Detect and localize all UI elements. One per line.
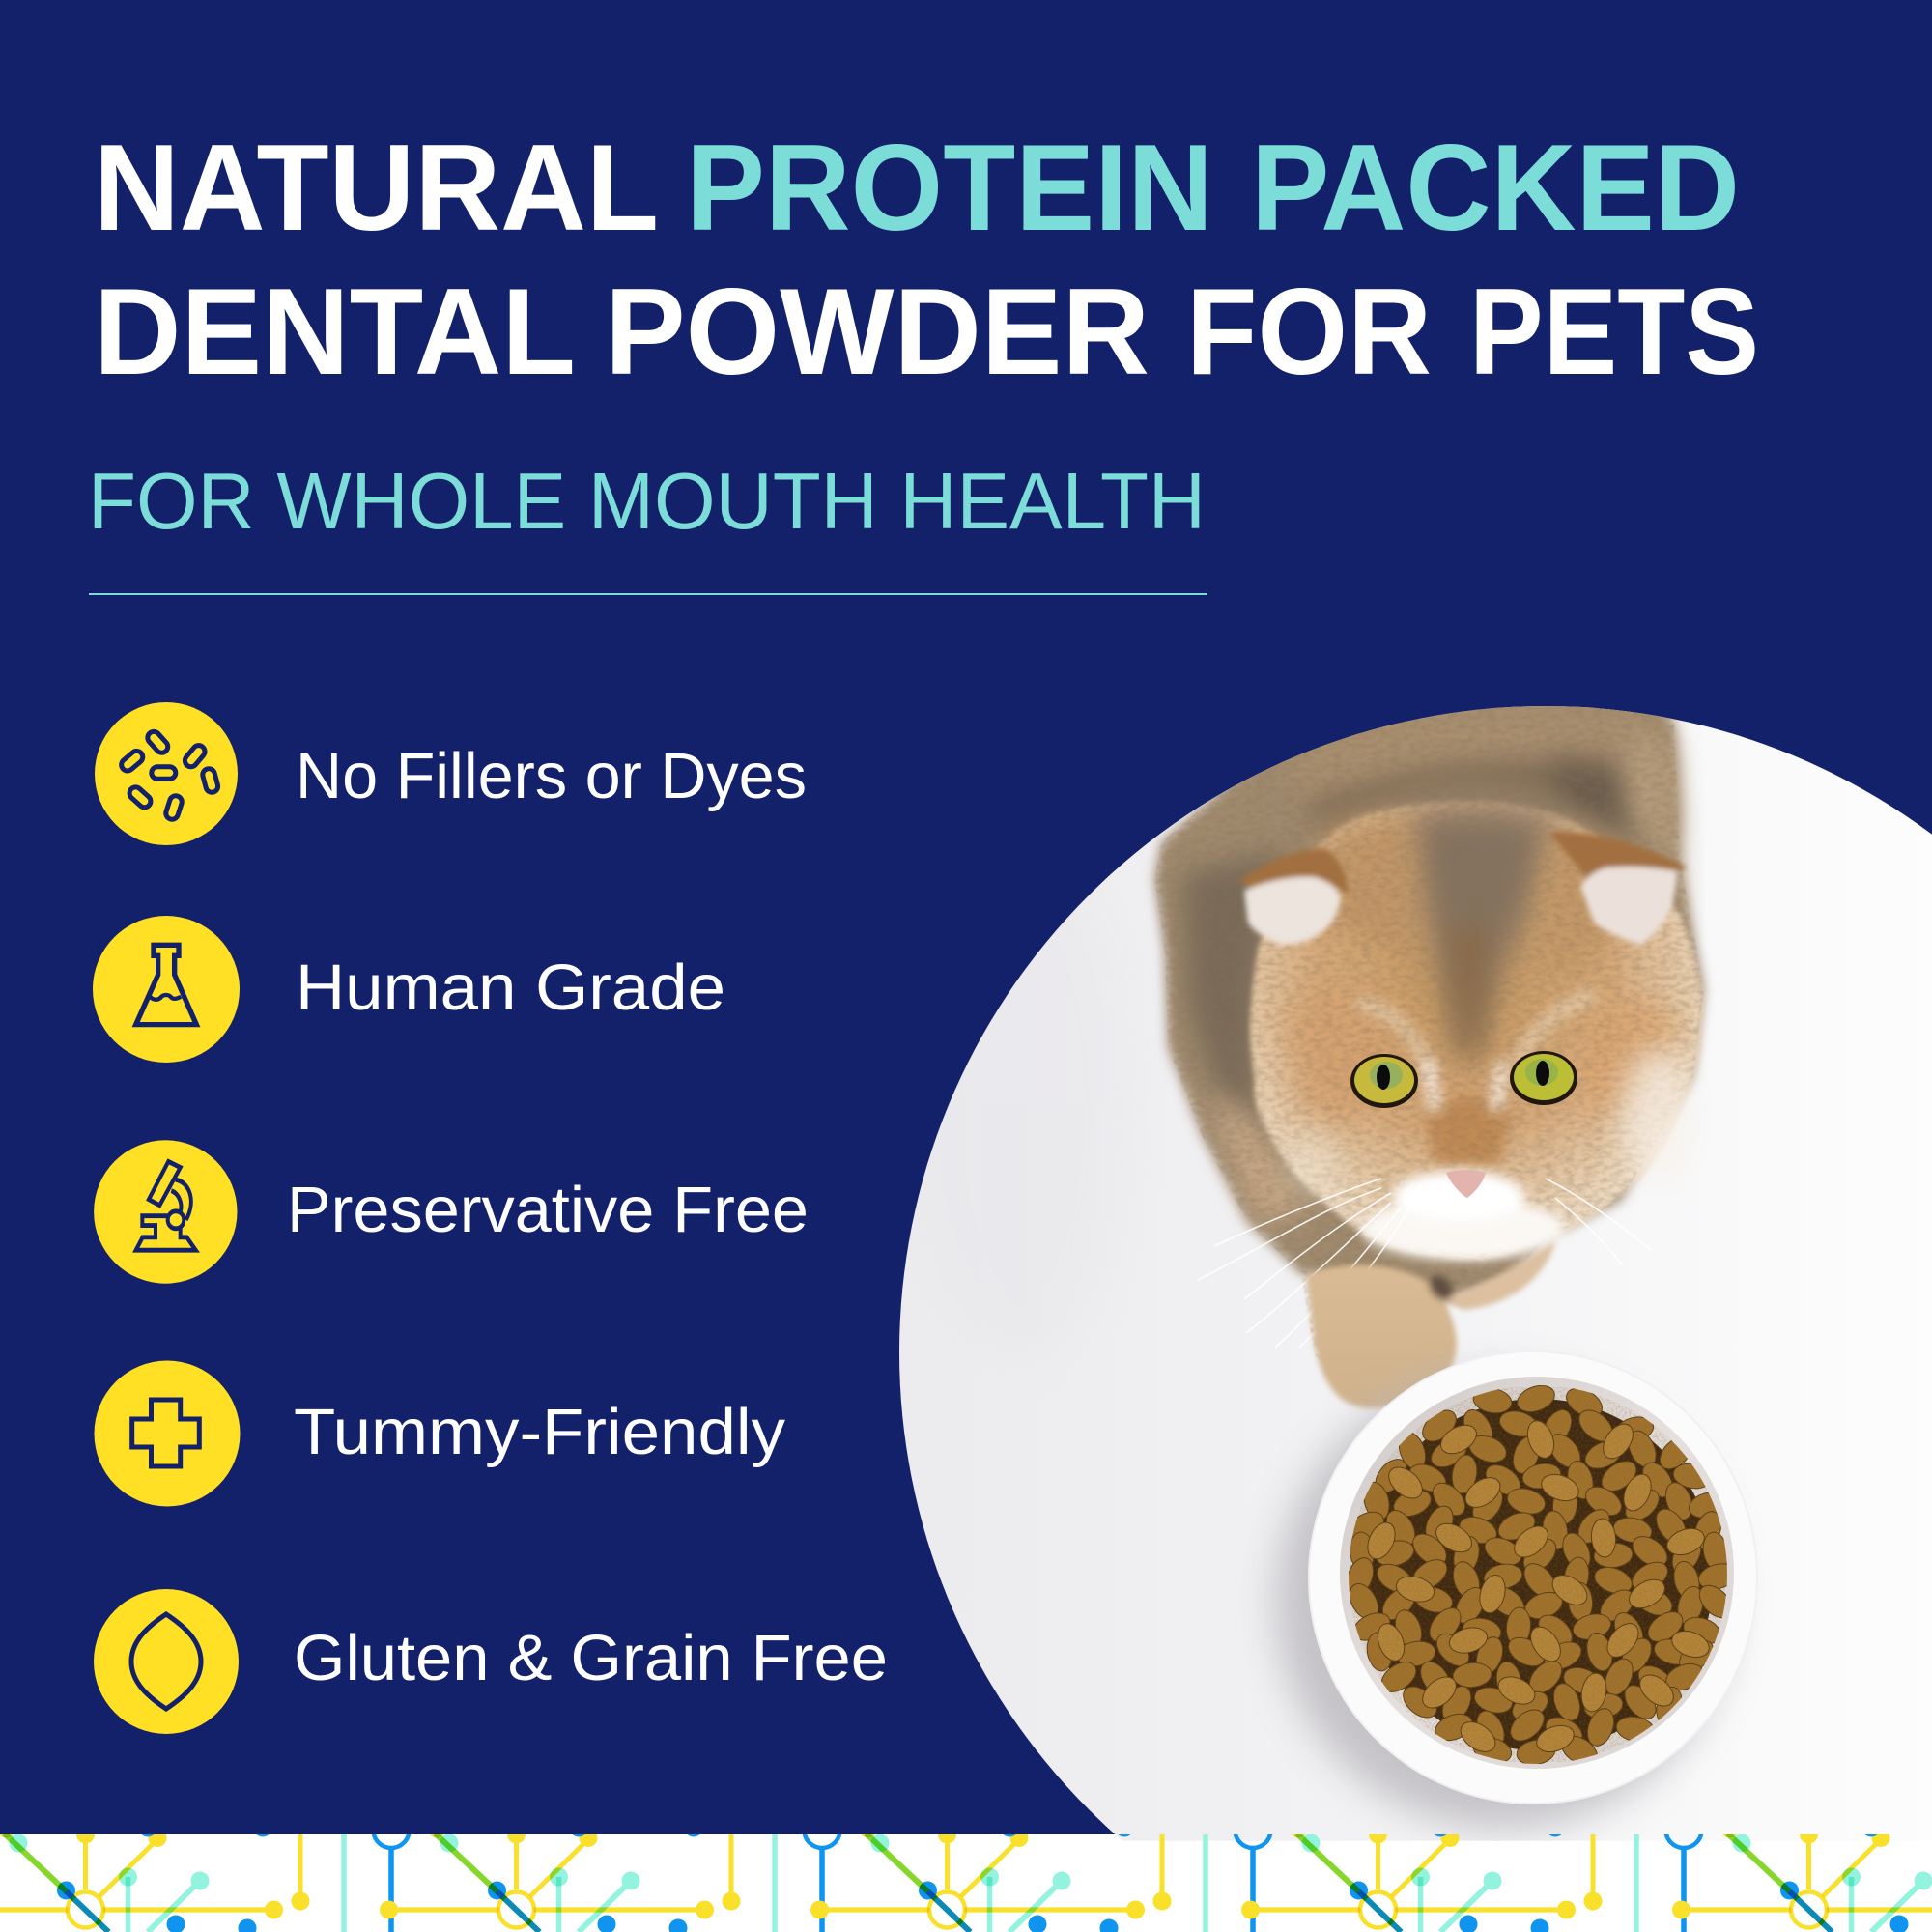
benefit: preservative free [94, 1140, 809, 1284]
cat chest and muzzle [1289, 1048, 1693, 1260]
food bowl [1275, 1351, 1757, 1830]
title: POWDER [605, 263, 1150, 400]
benefit: tummy-friendly: Tummy-Friendly [294, 1396, 786, 1468]
benefit: gluten and grain free: Gluten & Grain Free [294, 1622, 888, 1694]
cat body [1154, 676, 1704, 1299]
icon: medical cross [95, 1360, 240, 1507]
paw [1306, 1241, 1555, 1408]
decorative circuit pattern band [0, 1834, 1932, 1932]
nose [1446, 1170, 1486, 1198]
icon: capsules [95, 702, 238, 845]
cat head [1250, 801, 1702, 1260]
benefit: tummy-friendly [95, 1360, 786, 1507]
title: PETS [1469, 263, 1759, 400]
title [94, 119, 1759, 400]
right ear [1549, 832, 1687, 945]
title: FOR [1186, 263, 1432, 400]
benefit: human grade: Human Grade [296, 952, 725, 1024]
kibble [1342, 1380, 1740, 1771]
benefit: no fillers or dyes: No Fillers or Dyes [296, 740, 807, 812]
icon: grain [94, 1589, 239, 1734]
title: DENTAL [94, 263, 576, 400]
left eye [1350, 1054, 1418, 1108]
icon: microscope [94, 1140, 238, 1284]
right eye [1510, 1051, 1577, 1105]
benefit: no fillers or dyes [95, 702, 807, 845]
left ear [1238, 848, 1349, 945]
benefit: human grade [93, 916, 725, 1063]
benefit: preservative free: Preservative Free [287, 1174, 809, 1246]
title: NATURAL [94, 119, 659, 256]
fur texture [1154, 710, 1704, 1359]
subtitle: FOR WHOLE MOUTH HEALTH [88, 456, 1206, 546]
cat [1150, 676, 1710, 1410]
title: PACKED [1251, 119, 1740, 256]
title: PROTEIN [686, 119, 1213, 256]
photo: cat with food bowl [869, 676, 1932, 1932]
icon: flask [93, 916, 240, 1063]
benefit: gluten and grain free [94, 1589, 888, 1734]
whiskers [1198, 1179, 1652, 1348]
